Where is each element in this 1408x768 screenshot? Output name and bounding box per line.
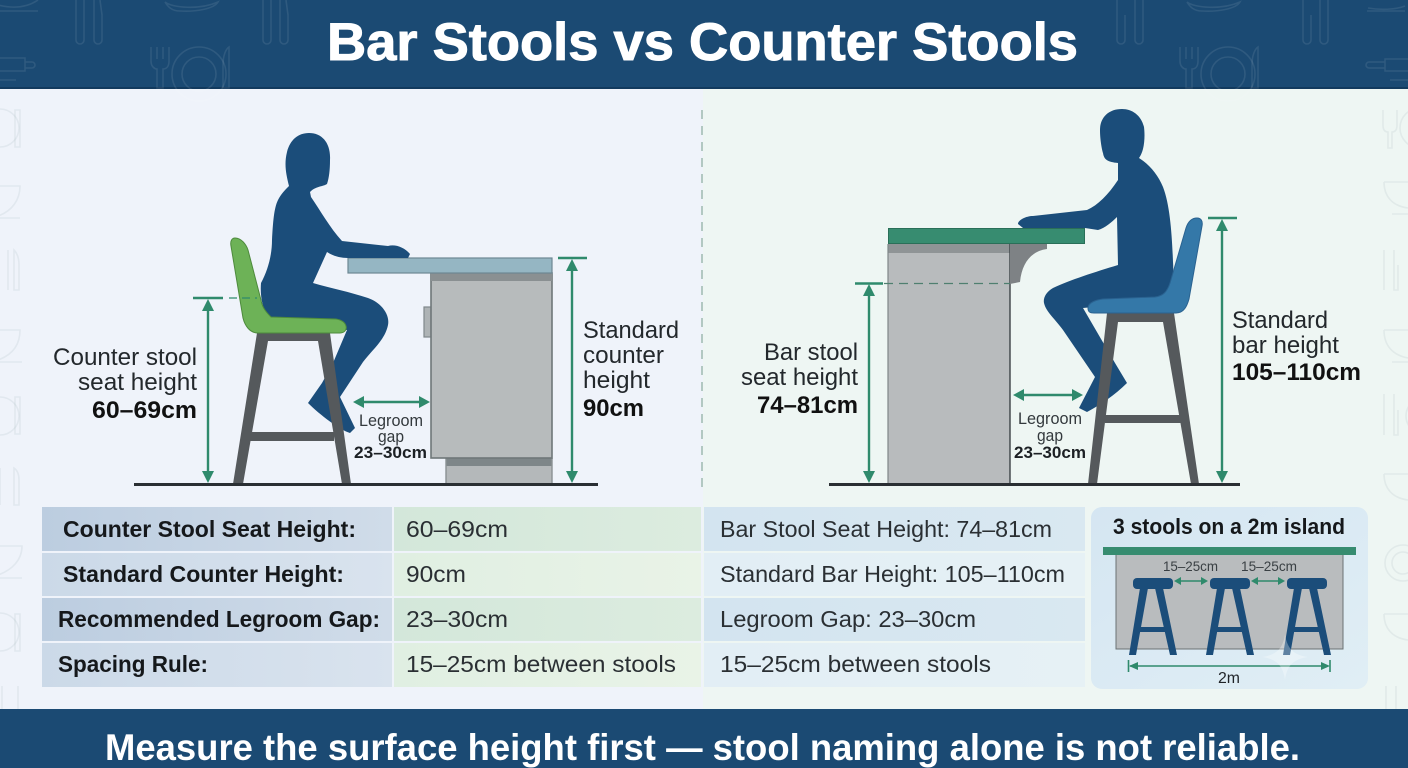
label: counter stool seat height: 60–69cm xyxy=(92,397,197,424)
spacing labels: 15–25cm xyxy=(1163,559,1218,574)
row: surface height: Standard Bar Height: 105–110cm xyxy=(720,561,1065,587)
row: spacing rule: 15–25cm between stools xyxy=(720,651,991,677)
counter top xyxy=(348,258,552,273)
panel: bar stool diagram xyxy=(741,109,1361,484)
arrow: legroom gap xyxy=(1013,389,1083,401)
row: seat height: Bar Stool Seat Height: 74–81cm xyxy=(720,516,1052,542)
inset heading: 3 stools on a 2m island xyxy=(1113,514,1345,539)
stool 1 xyxy=(1129,578,1177,655)
bar bracket xyxy=(1010,244,1047,284)
spacing arrows xyxy=(1174,577,1285,585)
bar body xyxy=(888,244,1010,484)
row: legroom gap xyxy=(42,598,1085,641)
label: legroom gap xyxy=(354,412,427,462)
panel: 3 stools on a 2m island xyxy=(1091,507,1368,689)
row: spacing rule: 15–25cm between stools xyxy=(406,651,676,677)
row: spacing rule: Spacing Rule: xyxy=(58,651,208,677)
row: legroom gap: 23–30cm xyxy=(406,606,508,632)
spacing labels: 15–25cm xyxy=(1241,559,1297,574)
label: standard bar height: Standard xyxy=(1232,307,1328,334)
row: seat height xyxy=(42,507,1085,551)
floor line xyxy=(829,483,1240,486)
label: legroom gap: 23–30cm xyxy=(354,444,427,462)
2m width arrow xyxy=(1128,660,1330,672)
label: counter stool seat height xyxy=(53,344,197,424)
bar top xyxy=(888,228,1084,244)
arrow: standard bar height xyxy=(1208,218,1237,483)
island body xyxy=(1116,554,1343,649)
person seated at bar xyxy=(1018,109,1173,412)
label: bar stool seat height: 74–81cm xyxy=(757,392,858,419)
stool 3 xyxy=(1283,578,1331,655)
row: surface height: Standard Counter Height: xyxy=(63,561,344,587)
person seated at counter xyxy=(261,133,410,433)
label: legroom gap: 23–30cm xyxy=(1014,444,1086,462)
footer text: Measure the surface height first — stool naming alone is not reliable. xyxy=(105,727,1300,768)
header banner xyxy=(0,0,1408,101)
island top xyxy=(1103,547,1356,555)
arrow: legroom gap xyxy=(353,396,430,408)
arrow: bar stool seat height xyxy=(855,284,1010,483)
label: bar stool seat height: Bar stool xyxy=(764,339,858,366)
right panel background xyxy=(703,88,1408,710)
label: standard bar height: bar height xyxy=(1232,332,1339,359)
label: standard counter height xyxy=(583,317,679,422)
label: standard counter height: 90cm xyxy=(583,395,644,422)
floor line xyxy=(134,483,598,486)
label: standard bar height xyxy=(1232,307,1361,386)
row: seat height: Counter Stool Seat Height: xyxy=(63,516,356,542)
label: bar stool seat height xyxy=(741,339,858,419)
stool 2 xyxy=(1206,578,1254,655)
counter stool xyxy=(231,238,351,484)
arrow: counter stool seat height xyxy=(193,298,257,483)
row: surface height xyxy=(42,553,1085,596)
spacing labels xyxy=(1163,559,1297,574)
row: legroom gap: Legroom Gap: 23–30cm xyxy=(720,606,976,632)
bar stool xyxy=(1088,218,1202,484)
2m label: 2m xyxy=(1218,670,1240,687)
counter cabinet xyxy=(424,273,552,484)
comparison table xyxy=(42,507,1085,687)
label: counter stool seat height: seat height xyxy=(78,369,197,396)
row: spacing rule xyxy=(42,643,1085,687)
row: legroom gap: Recommended Legroom Gap: xyxy=(58,606,380,632)
label: legroom gap: gap xyxy=(378,428,404,446)
arrow: standard counter height xyxy=(558,258,587,483)
row: seat height: 60–69cm xyxy=(406,516,508,542)
label: bar stool seat height: seat height xyxy=(741,364,858,391)
label: legroom gap: Legroom xyxy=(1018,410,1082,428)
label: standard counter height: Standard xyxy=(583,317,679,344)
label: legroom gap: gap xyxy=(1037,427,1063,445)
label: counter stool seat height: Counter stool xyxy=(53,344,197,371)
row: surface height: 90cm xyxy=(406,561,466,587)
sparkle xyxy=(1262,634,1308,680)
footer banner xyxy=(0,709,1408,768)
label: standard bar height: 105–110cm xyxy=(1232,359,1361,386)
panel: counter stool diagram xyxy=(53,133,679,484)
title: Bar Stools vs Counter Stools xyxy=(327,13,1078,72)
left panel background xyxy=(0,88,703,710)
label: standard counter height: counter xyxy=(583,342,664,369)
label: legroom gap xyxy=(1014,410,1086,462)
label: legroom gap: Legroom xyxy=(359,412,423,430)
label: standard counter height: height xyxy=(583,367,650,394)
